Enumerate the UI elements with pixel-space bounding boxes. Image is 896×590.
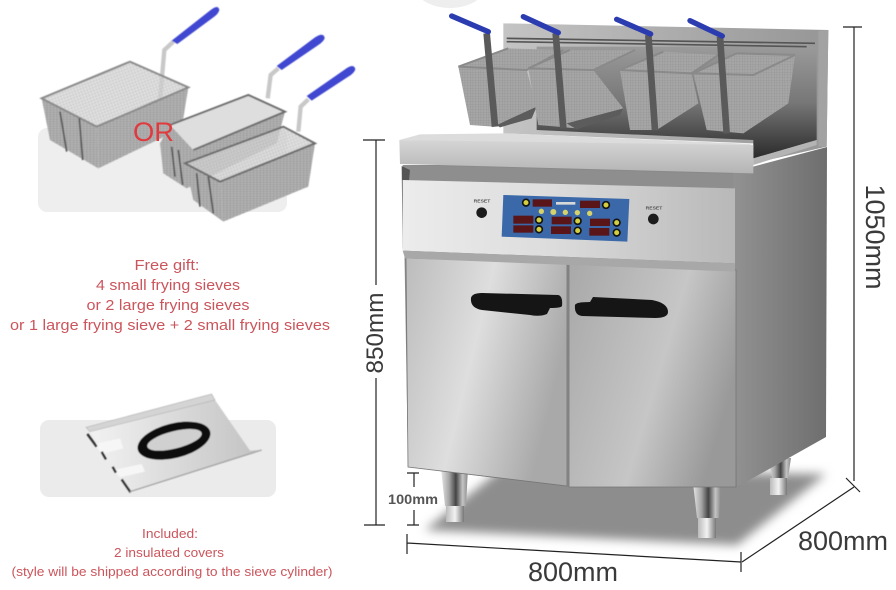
fryer legs [441,458,791,538]
basket 1 [458,48,563,127]
text block: free gift: or 1 large frying sieve + 2 small frying sieves [10,317,330,334]
fryer top with baskets [399,16,828,272]
dimension lines [363,27,862,572]
back leg [768,458,791,495]
basket 3 [620,52,718,130]
front right leg [693,483,721,538]
floor shadow [425,470,826,545]
black ring [134,415,214,467]
dimension: 1050mm: 1050mm [860,184,890,290]
OR label: OR [133,117,174,147]
gray backdrop: frying sieves [38,128,287,212]
text block: free gift: Free gift: [134,257,200,274]
text block: free gift [10,257,330,334]
front left leg [441,468,468,522]
control display [502,195,629,242]
text block: included [12,526,332,579]
left reset knob: RESET [474,199,490,205]
basket rail [507,38,815,47]
basket handles [452,16,727,133]
text block: included: Included: [142,526,198,541]
dimension: 100mm: 100mm [388,492,438,507]
control panel face [403,180,735,263]
dimension: 800mm depth: 800mm [798,526,888,556]
side panel [733,147,827,487]
gray backdrop: insulated cover [40,420,276,497]
left reset knob [474,199,490,218]
frying sieves [42,7,355,222]
text block: included: (style will be shipped according to the sieve cylinder) [12,564,332,579]
fryer well [537,47,817,158]
small sieve, upper [160,35,325,188]
fryer cabinet [403,147,827,487]
left door [406,258,567,486]
cabinet body [403,165,740,487]
right door handle [575,297,668,318]
countertop [399,133,753,148]
right door [569,263,736,487]
basket 4 [693,53,795,133]
right reset knob: RESET [646,206,662,212]
recessed band [403,165,733,188]
dimension: 850mm: 850mm [362,292,389,374]
small sieve, lower [185,66,355,222]
basket 2 [528,50,635,129]
front band [399,140,753,173]
gray partial circle at top edge [412,0,488,8]
backsplash [503,23,828,163]
dimension: 800mm width: 800mm [528,557,618,587]
left door handle [471,293,562,316]
large sieve [42,7,219,168]
right reset knob [646,206,662,224]
text block: free gift: 4 small frying sieves [96,277,240,294]
text block: included: 2 insulated covers [114,545,225,560]
text block: free gift: or 2 large frying sieves [86,297,250,314]
insulated cover [86,394,262,492]
